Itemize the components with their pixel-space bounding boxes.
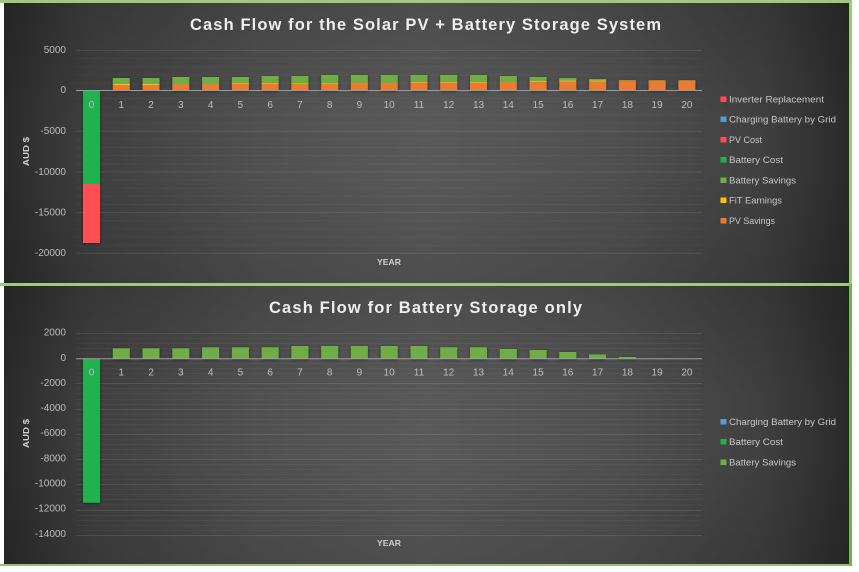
y axis labels: -14000 (35, 529, 66, 540)
x axis title: YEAR (377, 257, 401, 267)
y axis labels: -12000 (35, 504, 66, 514)
bar: year 16 (559, 78, 576, 90)
bar: year 10 (381, 346, 398, 359)
bar: year 10 (381, 75, 398, 90)
x axis labels: 5 (238, 368, 244, 378)
legend: PV Savings (729, 216, 775, 227)
bar: year 14 (500, 76, 517, 90)
bar: year 17 (589, 354, 606, 359)
x axis labels: 20 (681, 100, 693, 111)
x axis labels: 10 (384, 100, 395, 111)
bar: year 18 (619, 80, 636, 90)
legend: PV Cost (729, 135, 762, 146)
bar: year 7 (291, 346, 308, 359)
bar: year 19 (649, 80, 666, 90)
bars (83, 346, 636, 503)
bar: year 15 (530, 77, 547, 90)
y axis labels: -8000 (40, 454, 66, 464)
x axis labels: 15 (533, 100, 544, 111)
legend (720, 417, 836, 468)
y axis labels: -5000 (40, 126, 66, 137)
x axis labels: 19 (652, 368, 663, 378)
x axis labels: 8 (327, 100, 333, 111)
y axis labels: 0 (60, 85, 66, 96)
x axis labels: 1 (119, 100, 125, 111)
bar: year 3 (172, 77, 189, 90)
y axis labels: -15000 (35, 208, 66, 218)
legend: Battery Cost (729, 155, 783, 166)
bar: year 5 (232, 77, 249, 90)
bar: year 8 (321, 75, 338, 90)
bar: year 0 battery cost (83, 359, 100, 503)
x axis labels: 6 (267, 368, 273, 378)
y axis labels: -10000 (35, 478, 66, 490)
x axis labels: 0 (89, 368, 95, 378)
legend: Charging Battery by Grid (729, 417, 836, 428)
x axis labels: 4 (208, 100, 214, 111)
legend: Charging Battery by Grid (729, 114, 836, 126)
x axis labels: 5 (238, 100, 244, 111)
bar: year 0 (83, 91, 100, 243)
x axis labels: 14 (503, 100, 514, 111)
title: Cash Flow for Battery Storage only (269, 299, 583, 317)
y axis labels: 5000 (44, 45, 66, 56)
x axis labels: 18 (622, 368, 633, 378)
bar: year 2 (142, 348, 160, 359)
x axis labels: 0 (89, 100, 95, 111)
bar: year 5 (232, 347, 249, 359)
bar: year 11 (410, 346, 428, 359)
bar: year 11 (410, 75, 428, 90)
x axis labels: 14 (503, 368, 514, 378)
x axis labels: 7 (297, 368, 303, 378)
x axis labels: 16 (562, 100, 574, 111)
y axis labels (35, 45, 66, 259)
y axis labels: 0 (60, 353, 66, 364)
x axis labels: 8 (327, 368, 333, 378)
bar: year 9 (351, 75, 368, 90)
legend: Battery Cost (729, 437, 783, 448)
y axis labels: -4000 (40, 403, 66, 414)
bar: year 18 (619, 357, 636, 359)
x axis labels: 9 (357, 368, 363, 378)
x axis labels: 16 (562, 368, 574, 378)
bar: year 15 (530, 350, 547, 359)
y axis labels: -10000 (35, 167, 66, 178)
x axis labels: 12 (443, 368, 455, 378)
y axis title: AUD $ (21, 137, 31, 166)
panel: battery storage only cash flow (0, 284, 852, 566)
x axis labels: 2 (148, 368, 154, 378)
x axis labels: 15 (533, 368, 544, 378)
bar: year 13 (470, 347, 487, 359)
bar: year 17 (589, 79, 606, 90)
legend: FiT Earnings (729, 196, 782, 206)
y axis labels: 2000 (44, 328, 66, 338)
bar: year 9 (351, 346, 368, 359)
x axis labels: 4 (208, 368, 214, 378)
x axis labels: 12 (443, 100, 455, 111)
legend: Battery Savings (729, 458, 796, 468)
y axis labels: -20000 (35, 248, 66, 259)
x axis labels: 3 (178, 368, 184, 378)
bar: year 8 (321, 346, 338, 359)
title: Cash Flow for the Solar PV + Battery Storage System (190, 16, 661, 34)
x axis labels: 11 (414, 368, 425, 378)
legend: Inverter Replacement (729, 94, 824, 106)
x axis labels: 6 (267, 100, 273, 111)
bar: year 7 (291, 76, 308, 90)
bar: year 4 (202, 77, 219, 90)
y axis labels: -6000 (40, 428, 66, 439)
bar: year 2 (142, 78, 160, 90)
y axis labels (35, 328, 66, 540)
bar: year 1 (113, 348, 130, 359)
bar: year 12 (440, 75, 457, 90)
bar: year 1 (113, 78, 130, 90)
x axis labels: 18 (622, 100, 633, 111)
legend: Battery Savings (729, 176, 796, 186)
x axis labels: 17 (592, 100, 604, 111)
x axis labels: 3 (178, 100, 184, 111)
bar: year 16 (559, 352, 576, 359)
bar: year 14 (500, 349, 517, 359)
panel: solar PV + battery cash flow (0, 0, 852, 284)
x axis labels (89, 368, 693, 378)
stacked bars (83, 75, 695, 243)
bar: year 12 (440, 347, 457, 359)
bar: year 20 (678, 80, 695, 90)
x axis labels (89, 100, 693, 111)
bar: year 4 (202, 347, 219, 359)
x axis title: YEAR (377, 538, 401, 548)
bar: year 6 (262, 76, 279, 90)
x axis labels: 9 (357, 100, 363, 111)
x axis labels: 13 (473, 100, 484, 111)
bar: year 13 (470, 75, 487, 90)
x axis labels: 19 (652, 100, 663, 111)
y axis labels: -2000 (40, 378, 66, 389)
x axis labels: 11 (414, 100, 425, 111)
legend (720, 94, 836, 227)
x axis labels: 1 (119, 368, 125, 378)
x axis labels: 13 (473, 368, 484, 378)
x axis labels: 2 (148, 100, 154, 111)
y axis title: AUD $ (21, 419, 31, 448)
x axis labels: 10 (384, 368, 395, 378)
x axis labels: 20 (681, 368, 693, 378)
bar: year 3 (172, 348, 189, 359)
x axis labels: 17 (592, 368, 604, 378)
x axis labels: 7 (297, 100, 303, 111)
bar: year 6 (262, 347, 279, 359)
